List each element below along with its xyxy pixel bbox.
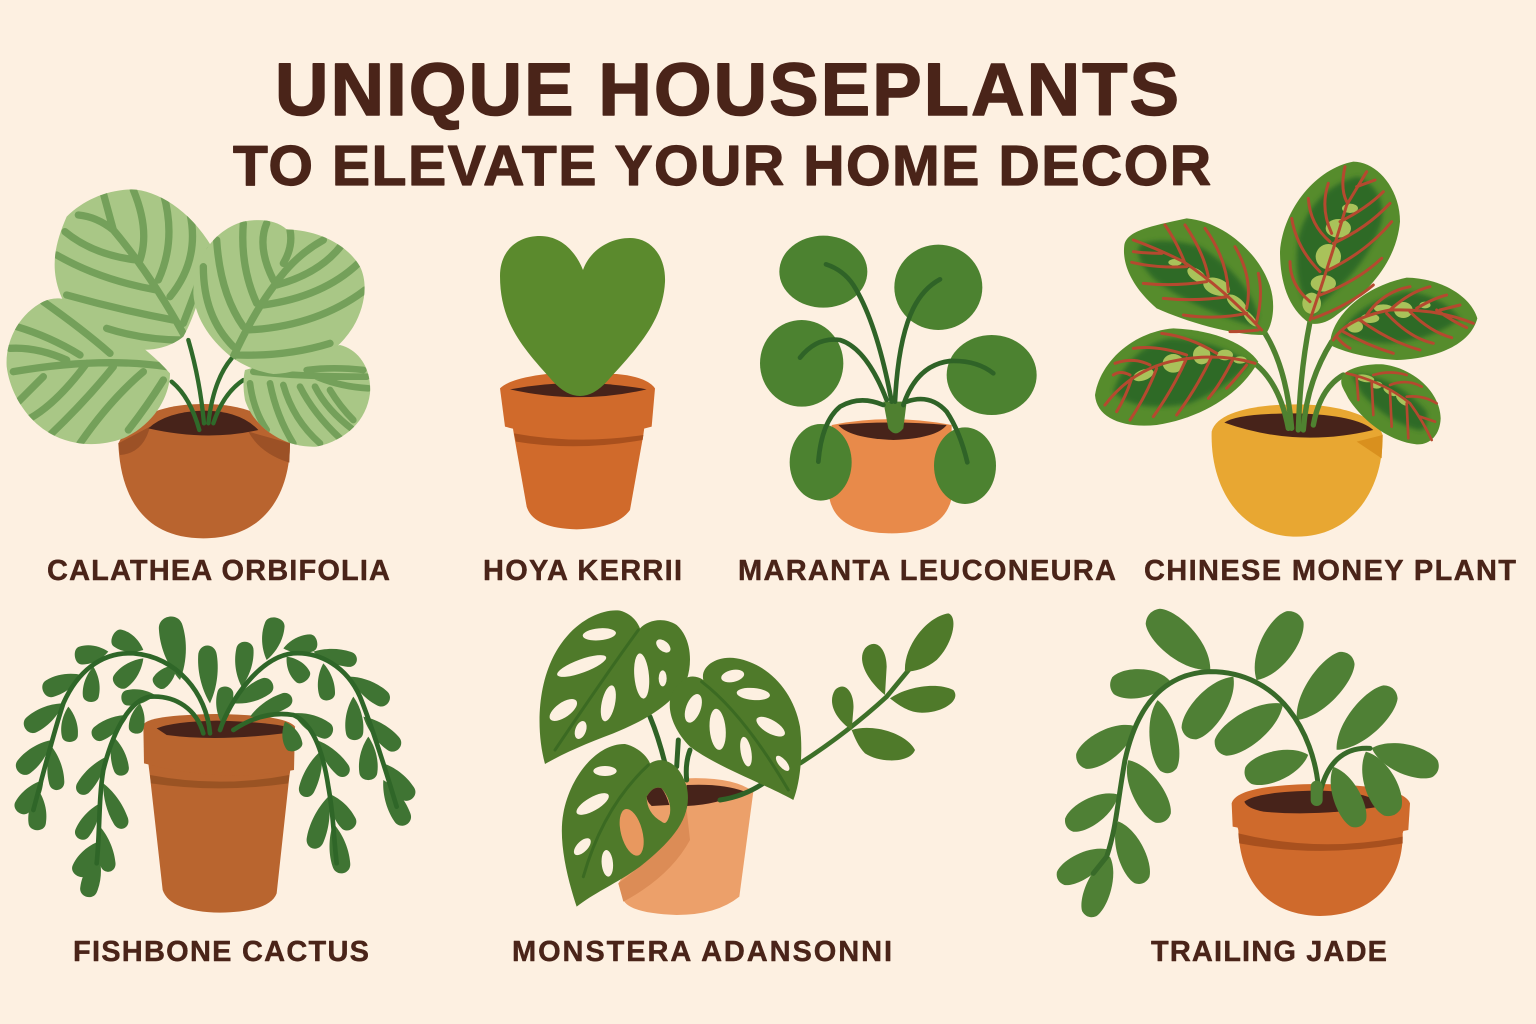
- stems: [650, 717, 763, 800]
- pot: [618, 778, 753, 915]
- soil: [1224, 413, 1373, 438]
- label: Trailing Jade: TRAILING JADE: [1151, 936, 1387, 968]
- pot: [1233, 813, 1408, 916]
- title: [233, 48, 1211, 198]
- plant: Hoya Kerrii: [500, 236, 665, 529]
- soil: [1244, 791, 1380, 813]
- stems: [172, 340, 243, 430]
- label: Hoya Kerrii: HOYA KERRII: [483, 555, 682, 587]
- plant: Maranta Leuconeura: [760, 236, 1037, 533]
- branch leaves: [832, 613, 955, 760]
- soil: [148, 411, 258, 435]
- leaf: top left: [55, 189, 212, 350]
- leaf: bottom: [562, 744, 688, 907]
- leaf: right: [1330, 278, 1477, 360]
- leaf: bottom right: [243, 345, 370, 447]
- heart leaf: [500, 236, 665, 396]
- leaf: top left: [540, 610, 690, 764]
- plant: Trailing Jade: [1052, 601, 1443, 921]
- stems: [33, 653, 397, 863]
- stems: [1257, 322, 1343, 430]
- subheading: TO ELEVATE YOUR HOME DECOR: [233, 134, 1211, 198]
- leaflets: [11, 614, 419, 899]
- leaf: left: [7, 298, 170, 444]
- front leaves: [1317, 745, 1409, 832]
- label: Calathea Orbifolia: CALATHEA ORBIFOLIA: [47, 555, 390, 587]
- stem base: [883, 402, 907, 433]
- plant: Calathea Orbifolia: [7, 189, 370, 538]
- stems: [800, 264, 993, 462]
- branch stem: [800, 668, 910, 763]
- label: Maranta Leuconeura: MARANTA LEUCONEURA: [738, 555, 1116, 587]
- leaf: top right: [193, 220, 365, 374]
- soil: [838, 422, 947, 440]
- pot: [118, 404, 290, 538]
- pot: [147, 750, 293, 913]
- pot: [829, 419, 952, 533]
- leaves: [1052, 601, 1443, 921]
- leaf: top: [1280, 162, 1400, 324]
- leaf: right: [670, 658, 801, 800]
- soil: [157, 721, 283, 738]
- label: Chinese Money Plant: CHINESE MONEY PLANT: [1144, 555, 1516, 587]
- plant: Fishbone Cactus: [11, 614, 419, 913]
- label: Fishbone Cactus: FISHBONE CACTUS: [73, 936, 369, 968]
- label: Monstera Adansonni: MONSTERA ADANSONNI: [512, 936, 892, 968]
- leaves: [760, 236, 1037, 504]
- pot: [500, 374, 655, 529]
- leaf: lower right: [1341, 364, 1441, 444]
- soil: [687, 785, 745, 806]
- leaf: lower left: [1095, 328, 1258, 426]
- main heading: UNIQUE HOUSEPLANTS: [275, 48, 1179, 131]
- plant: Monstera Adansonni: [540, 610, 955, 915]
- pot: [1212, 404, 1383, 537]
- plant: Chinese Money Plant: [1095, 162, 1477, 537]
- leaf: upper left: [1124, 218, 1273, 335]
- stems: [1093, 672, 1370, 873]
